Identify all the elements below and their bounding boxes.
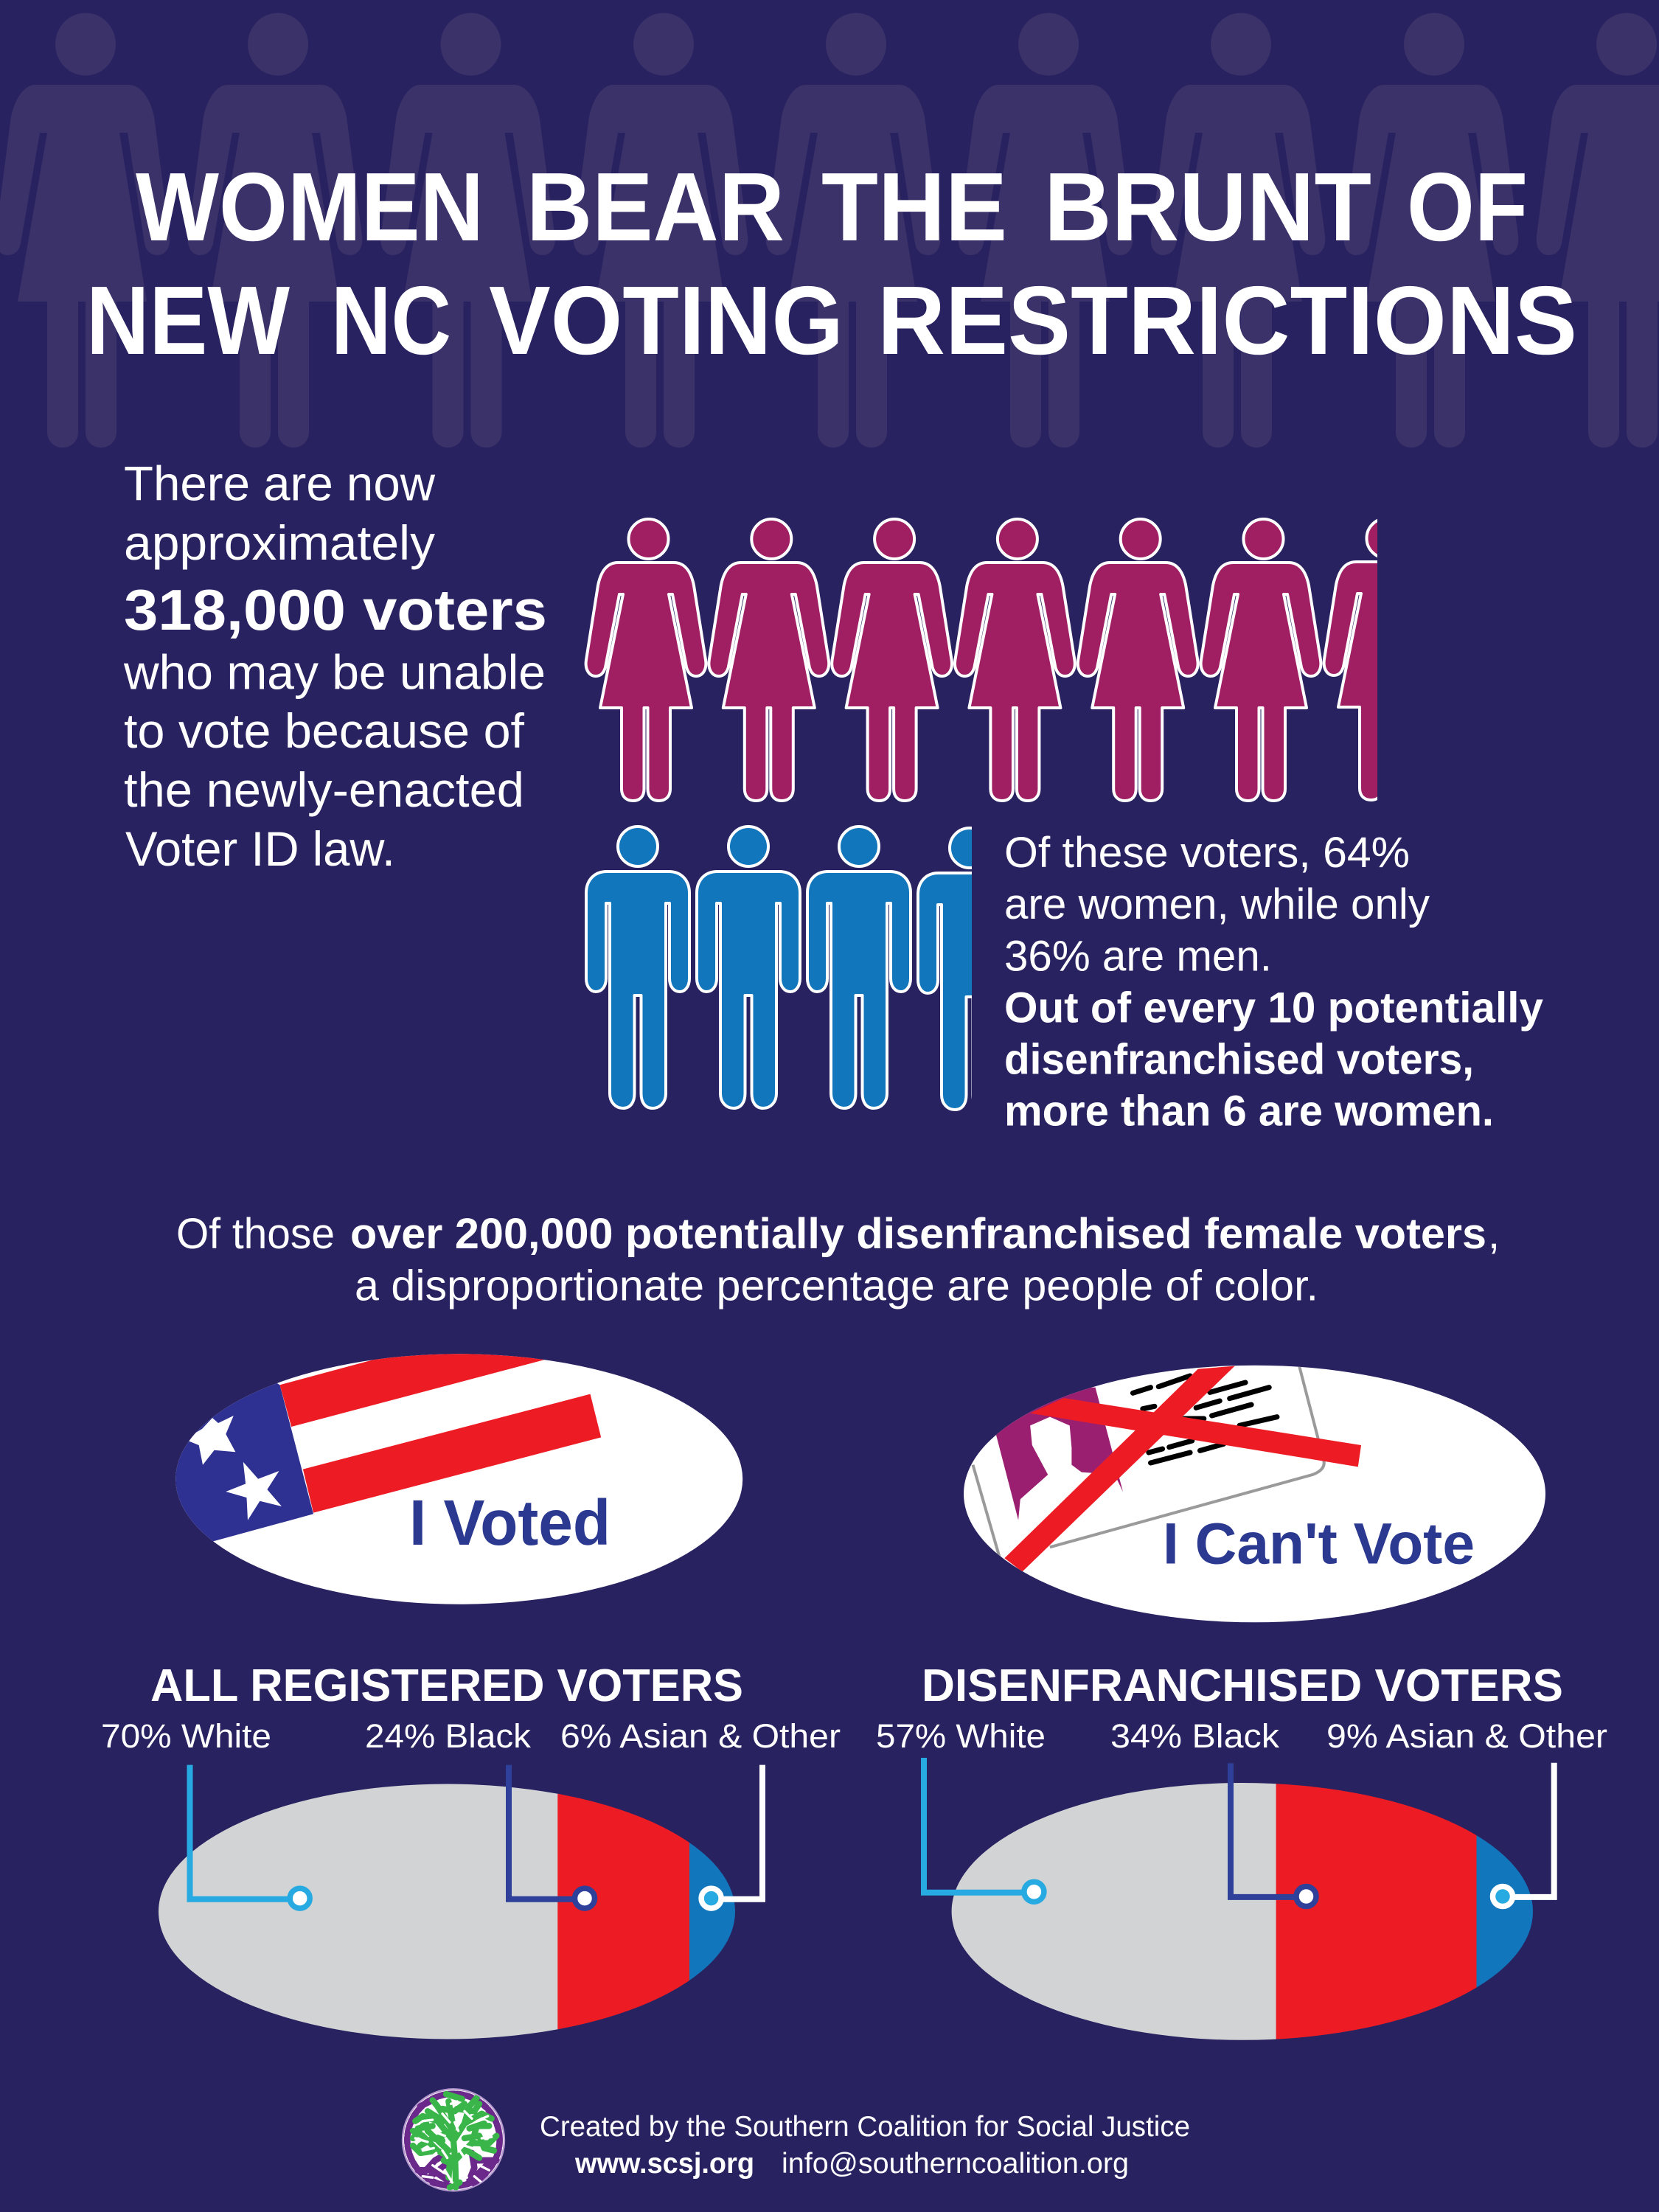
text block: women vs men share: more than 6 are women. — [1004, 1087, 1494, 1135]
title: BEAR — [526, 153, 785, 261]
title: OF — [1407, 153, 1528, 261]
text block: women vs men share: Out of every 10 potentially — [1004, 984, 1543, 1032]
text block: 318,000 voters — [123, 456, 547, 876]
footer credit — [540, 2111, 1190, 2180]
heading: ALL REGISTERED VOTERS — [150, 1660, 743, 1711]
title: NC — [331, 266, 451, 375]
icon row: women (64%) — [586, 518, 1444, 801]
text block: women vs men share: disenfranchised voters, — [1004, 1035, 1474, 1084]
title: NEW — [86, 266, 290, 375]
text block: 318,000 voters: the newly-enacted — [124, 762, 524, 817]
panel: disenfranchised voters — [876, 1660, 1607, 2050]
leader: asian and other 6% — [701, 1765, 762, 1908]
sticker: I Can't Vote: I Can't Vote — [1163, 1510, 1475, 1576]
title: VOTING — [489, 266, 844, 375]
text block: 318,000 voters: There are now — [124, 456, 435, 510]
oval chart — [159, 1784, 735, 2039]
footer credit: Created by the Southern Coalition for Social Justice — [540, 2111, 1190, 2143]
text block: people of color: Of those — [176, 1210, 335, 1258]
text block: women vs men share: Of these voters, 64% — [1004, 829, 1410, 877]
text block: 318,000 voters: Voter ID law. — [125, 821, 395, 876]
title: RESTRICTIONS — [877, 266, 1577, 375]
leader: white 70% — [190, 1765, 310, 1908]
text block: people of color: over 200,000 potentially disenfranchised female voters — [350, 1210, 1486, 1258]
labels: 34% Black — [1110, 1717, 1280, 1755]
labels — [876, 1717, 1607, 1755]
text block: women vs men share: 36% are men. — [1004, 932, 1272, 981]
labels — [101, 1717, 841, 1755]
text block: people of color — [176, 1210, 1500, 1310]
labels: 24% Black — [365, 1717, 532, 1755]
labels: 57% White — [876, 1717, 1046, 1755]
text block: 318,000 voters: to vote because of — [124, 703, 525, 758]
labels: 6% Asian & Other — [560, 1717, 841, 1755]
title: BRUNT — [1044, 153, 1371, 261]
background row of women silhouettes — [0, 13, 1659, 448]
text block: women vs men share: are women, while only — [1004, 880, 1430, 928]
leader: asian and other 9% — [1492, 1763, 1554, 1907]
title: WOMEN — [136, 153, 484, 261]
text block: women vs men share — [1004, 829, 1543, 1135]
logo: Southern Coalition for Social Justice tree — [403, 2089, 504, 2191]
title: THE — [821, 153, 1007, 261]
icon row: men (36%) — [585, 825, 972, 1111]
crossed-out voter ID card — [973, 1364, 1361, 1572]
text block: 318,000 voters: 318,000 voters — [124, 577, 547, 642]
title — [86, 153, 1577, 375]
sticker: I Voted — [162, 1344, 742, 1604]
oval chart — [944, 1777, 1543, 2050]
leader: white 57% — [924, 1758, 1044, 1902]
text block: people of color: a disproportionate percentage are people of color. — [355, 1262, 1318, 1310]
flag on sticker — [175, 1354, 602, 1541]
text block: people of color: , — [1488, 1210, 1500, 1258]
labels: 9% Asian & Other — [1326, 1717, 1607, 1755]
leader: black 24% — [509, 1765, 594, 1908]
panel: all registered voters — [101, 1660, 841, 2050]
text block: 318,000 voters: approximately — [124, 515, 435, 570]
text block: 318,000 voters: who may be unable — [123, 644, 546, 699]
footer credit: info@southerncoalition.org — [782, 2148, 1129, 2180]
labels: 70% White — [101, 1717, 271, 1755]
sticker: I Can't Vote — [964, 1364, 1545, 1622]
heading: DISENFRANCHISED VOTERS — [922, 1660, 1563, 1711]
sticker: I Voted: I Voted — [409, 1487, 611, 1559]
footer credit: www.scsj.org — [574, 2148, 754, 2180]
leader: black 34% — [1231, 1763, 1316, 1907]
